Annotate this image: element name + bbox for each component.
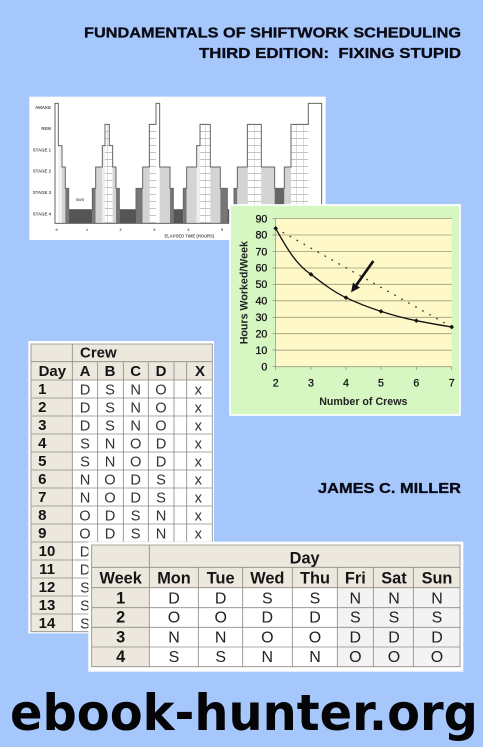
header text: Wed <box>250 570 284 588</box>
crew cells: S <box>105 383 115 399</box>
day numbers: 2 <box>38 399 47 416</box>
stage labels <box>33 105 52 216</box>
axis numbers: 10 <box>255 345 267 357</box>
day numbers: 10 <box>39 543 55 560</box>
crew cells: N <box>80 473 90 489</box>
header text: Thu <box>300 570 330 588</box>
crew cells: S <box>80 599 90 615</box>
data points <box>273 226 454 329</box>
crew cells: D <box>80 401 90 417</box>
panel: hours worked line chart: 2 <box>273 378 279 390</box>
curve <box>276 228 452 327</box>
crew cells: x <box>195 455 203 471</box>
schedule cells: D <box>431 629 443 646</box>
title: FUNDAMENTALS OF SHIFTWORK SCHEDULING <box>84 26 461 42</box>
crew cells: O <box>155 401 167 417</box>
crew cells: O <box>104 473 116 489</box>
schedule cells <box>168 590 443 666</box>
SWS note: SWS <box>76 198 85 202</box>
crew cells: x <box>195 473 203 489</box>
crew cells: x <box>195 437 203 453</box>
sleep stage blocks <box>55 103 322 223</box>
panel: hours worked line chart: 5 <box>378 378 384 390</box>
crew cells: D <box>130 491 141 507</box>
schedule cells: S <box>350 610 361 627</box>
header text: Mon <box>157 570 191 588</box>
title: THIRD EDITION: FIXING STUPID <box>199 46 461 62</box>
grid <box>31 344 212 632</box>
hypnogram outline <box>55 103 322 223</box>
day numbers: 3 <box>38 417 47 434</box>
week numbers: 3 <box>116 628 125 646</box>
schedule cells: O <box>168 610 180 627</box>
header text <box>99 549 452 588</box>
schedule cells: O <box>388 649 400 666</box>
day numbers: 13 <box>39 597 55 614</box>
axis numbers: 30 <box>255 312 267 324</box>
schedule cells: S <box>310 590 320 607</box>
title <box>84 26 461 62</box>
crew cells: O <box>155 419 167 435</box>
axis numbers <box>255 213 267 373</box>
time axis: 3 <box>153 227 156 232</box>
crew cells: S <box>80 617 90 633</box>
panel: hours worked line chart: 7 <box>449 378 455 390</box>
time axis: ELAPSED TIME (HOURS) <box>165 233 215 238</box>
schedule cells: N <box>431 590 443 607</box>
time axis: 0 <box>56 227 59 232</box>
axis titles: Hours Worked/Week <box>239 241 251 344</box>
crew cells: x <box>195 401 203 417</box>
crew cells: N <box>130 419 141 435</box>
week numbers: 4 <box>116 648 125 666</box>
day numbers: 9 <box>38 525 47 542</box>
crew cells: N <box>130 401 141 417</box>
axis numbers: 70 <box>255 246 267 258</box>
panel: hours worked line chart: 4 <box>343 378 349 390</box>
schedule cells: O <box>261 629 274 646</box>
time axis: 1 <box>86 227 89 232</box>
stage labels: STAGE 1 <box>33 147 52 152</box>
week numbers: 1 <box>116 589 125 607</box>
axis numbers: 90 <box>255 213 267 225</box>
header fills <box>31 344 212 632</box>
schedule cells: S <box>432 610 442 627</box>
header text: Day <box>39 363 67 380</box>
schedule cells: O <box>349 649 362 666</box>
crew cells: S <box>80 437 90 453</box>
crew cells: D <box>105 509 115 525</box>
crew cells: N <box>156 509 166 525</box>
schedule cells: S <box>215 649 226 666</box>
plot area <box>276 218 452 367</box>
crew cells: D <box>80 419 90 435</box>
stage labels: STAGE 3 <box>33 190 52 195</box>
header text: Day <box>290 549 320 567</box>
crew cells: D <box>130 473 141 489</box>
panel: hours worked line chart: Number of Crews <box>319 396 408 408</box>
schedule cells: N <box>168 629 180 646</box>
crew cells: D <box>156 437 166 453</box>
header text: Tue <box>207 570 235 588</box>
crew cells: S <box>131 527 141 543</box>
schedule cells: D <box>262 610 273 627</box>
schedule cells: D <box>168 590 180 607</box>
stage labels: AWAKE <box>35 105 51 110</box>
stage labels: STAGE 2 <box>33 169 52 174</box>
schedule cells: N <box>262 649 273 666</box>
axis numbers: 50 <box>255 279 267 291</box>
schedule cells: O <box>431 649 443 666</box>
crew cells: x <box>195 509 203 525</box>
schedule cells: D <box>309 610 321 627</box>
schedule cells: S <box>262 590 273 607</box>
stage labels: REM <box>41 126 51 131</box>
axis numbers: 20 <box>255 328 267 340</box>
crew cells: O <box>130 455 141 471</box>
crew cells: D <box>105 527 115 543</box>
crew cells: x <box>195 527 203 543</box>
axis numbers: 40 <box>255 296 267 308</box>
crew cells: O <box>79 509 91 525</box>
schedule cells: S <box>169 649 179 666</box>
schedule cells: D <box>350 629 361 646</box>
day numbers: 14 <box>39 615 56 632</box>
day numbers: 1 <box>38 381 47 398</box>
schedule cells: N <box>350 590 361 607</box>
crew cells: S <box>105 401 115 417</box>
header text: C <box>130 363 141 380</box>
crew cells: O <box>104 491 116 507</box>
crew cells: D <box>80 545 90 561</box>
time axis <box>56 227 224 238</box>
grid <box>92 545 460 667</box>
table: crew rotation <box>28 341 214 633</box>
crew cells: N <box>105 455 115 471</box>
crew cells: N <box>130 383 141 399</box>
arrow <box>351 261 373 292</box>
panel: hours worked line chart <box>230 205 460 415</box>
header text: Sun <box>422 570 452 588</box>
header text: B <box>105 363 116 380</box>
schedule cells: N <box>309 649 321 666</box>
day numbers: 12 <box>39 579 55 596</box>
crew cells: O <box>130 437 141 453</box>
day numbers <box>38 381 56 632</box>
crew cells: x <box>195 491 203 507</box>
header text: Crew <box>80 345 117 362</box>
day numbers: 8 <box>38 507 47 524</box>
crew cells: N <box>105 437 115 453</box>
crew cells: x <box>195 419 203 435</box>
table: weekly schedule <box>88 542 463 672</box>
axis numbers: 80 <box>255 230 267 242</box>
day numbers: 7 <box>38 489 47 506</box>
crew cells: D <box>80 563 90 579</box>
time axis: 2 <box>120 227 123 232</box>
crew cells: N <box>156 527 166 543</box>
schedule cells: D <box>215 590 226 607</box>
schedule cells: S <box>389 610 399 627</box>
header text: A <box>80 363 91 380</box>
schedule cells: O <box>309 629 321 646</box>
crew cells: D <box>80 383 90 399</box>
dotted line <box>276 228 452 327</box>
time axis: 4 <box>187 227 190 232</box>
panel: sleep stages hypnogram <box>29 97 326 240</box>
crew cells: S <box>156 473 166 489</box>
schedule cells: D <box>388 629 400 646</box>
crew cells: O <box>155 383 167 399</box>
header text <box>39 345 205 380</box>
header text: Sat <box>381 570 407 588</box>
crew cells: S <box>156 491 166 507</box>
crew cells <box>79 383 203 633</box>
crew cells: x <box>195 383 203 399</box>
crew cells: S <box>131 509 141 525</box>
panel: hours worked line chart: 3 <box>308 378 314 390</box>
header text: X <box>195 363 205 380</box>
axis numbers: 0 <box>261 361 267 373</box>
schedule cells: N <box>215 629 226 646</box>
week numbers: 2 <box>116 609 125 627</box>
crew cells: S <box>105 419 115 435</box>
crew cells: O <box>79 527 91 543</box>
time axis: 5 <box>221 227 224 232</box>
schedule cells: O <box>214 610 227 627</box>
day numbers: 4 <box>38 435 47 452</box>
header text: D <box>156 363 167 380</box>
header fills <box>92 545 460 667</box>
week numbers <box>116 589 125 666</box>
author: JAMES C. MILLER <box>318 481 462 497</box>
day numbers: 6 <box>38 471 47 488</box>
stage labels: STAGE 4 <box>33 211 52 216</box>
crew cells: N <box>80 491 90 507</box>
header text: Fri <box>345 570 366 588</box>
axis numbers: 60 <box>255 263 267 275</box>
day numbers: 5 <box>38 453 47 470</box>
day numbers: 11 <box>39 561 55 578</box>
crew cells: S <box>80 455 90 471</box>
header text: Week <box>99 570 143 588</box>
schedule cells: N <box>388 590 400 607</box>
panel: hours worked line chart: 6 <box>413 378 419 390</box>
crew cells: S <box>80 581 90 597</box>
crew cells: D <box>156 455 166 471</box>
